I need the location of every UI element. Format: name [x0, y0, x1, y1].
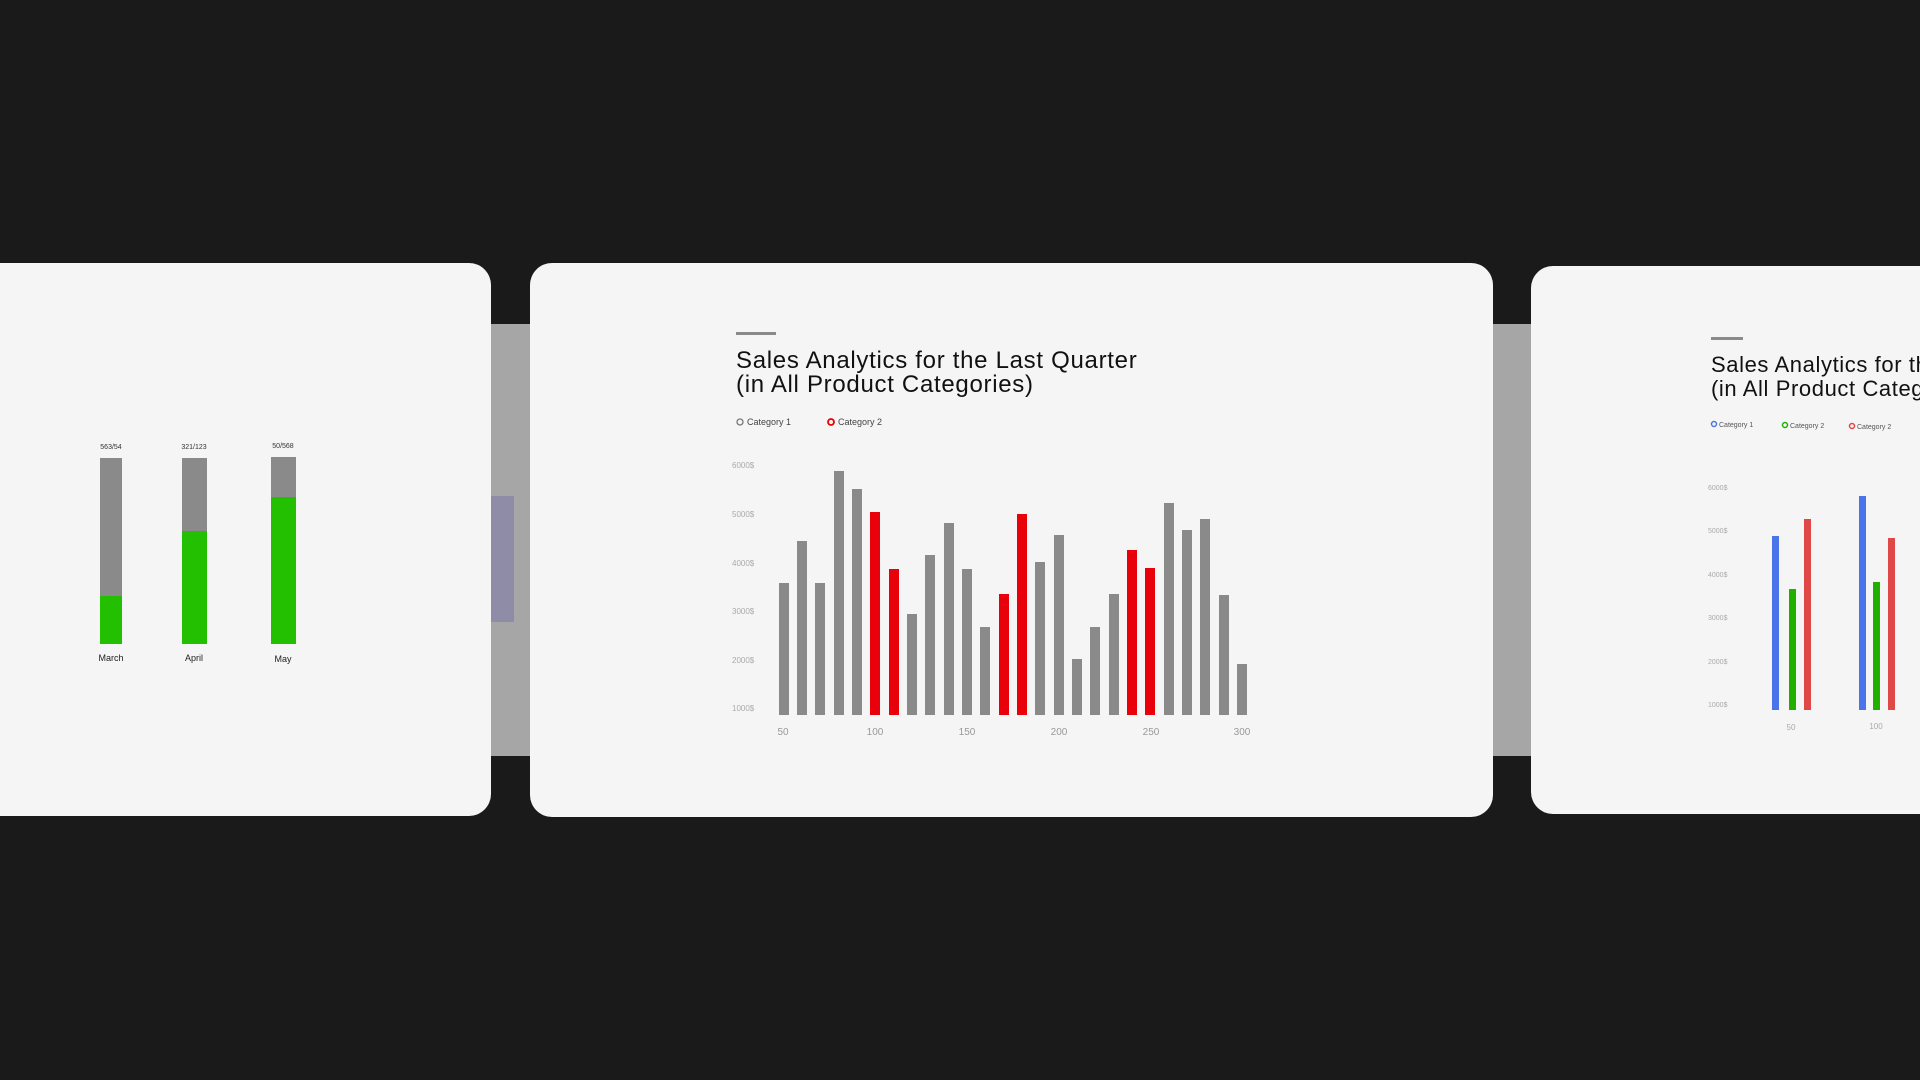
x axis labels: 100	[867, 727, 884, 738]
bar: March: 563/54	[100, 444, 122, 451]
y axis right: 2000$	[1708, 659, 1728, 666]
bar: May: 50/568	[272, 443, 294, 450]
legend: Category 2	[838, 417, 882, 427]
bar: May: May	[274, 654, 292, 664]
x axis right: 50	[1787, 723, 1796, 732]
bar: March: March	[98, 653, 124, 663]
title right	[1711, 352, 1920, 401]
panel: left card	[0, 263, 491, 816]
title: (in All Product Categories)	[736, 371, 1034, 398]
y axis right: 3000$	[1708, 615, 1728, 622]
panel: center card	[530, 263, 1493, 817]
x axis labels: 200	[1051, 727, 1068, 738]
y axis labels: 2000$	[732, 656, 755, 665]
panel: right card	[1531, 266, 1920, 814]
bar: April: 321/123	[181, 444, 207, 451]
y axis labels: 3000$	[732, 607, 755, 616]
x axis right: 100	[1869, 722, 1883, 731]
y axis labels: 5000$	[732, 510, 755, 519]
legend right: Category 2	[1790, 423, 1824, 430]
y axis labels	[732, 461, 755, 713]
title	[736, 347, 1137, 398]
legend right: Category 2	[1857, 424, 1891, 431]
x axis labels: 50	[777, 727, 789, 738]
bar: March	[98, 444, 124, 663]
bar: April	[181, 444, 207, 663]
background strip left	[480, 324, 540, 756]
grouped bar chart	[1772, 496, 1895, 710]
x axis labels: 300	[1234, 727, 1251, 738]
y axis right: 6000$	[1708, 485, 1728, 492]
bar: May	[271, 443, 296, 664]
legend	[737, 417, 882, 427]
legend right: Category 1	[1719, 422, 1753, 429]
bar chart	[779, 471, 1247, 715]
y axis labels: 4000$	[732, 559, 755, 568]
x axis right	[1787, 722, 1883, 732]
legend right	[1712, 422, 1891, 431]
x axis labels: 250	[1143, 727, 1160, 738]
y axis right: 5000$	[1708, 528, 1728, 535]
x axis labels: 150	[959, 727, 976, 738]
bar: April: April	[185, 653, 203, 663]
title: Sales Analytics for the Last Quarter	[736, 347, 1137, 374]
y axis labels: 1000$	[732, 704, 755, 713]
y axis right: 4000$	[1708, 572, 1728, 579]
y axis labels: 6000$	[732, 461, 755, 470]
y axis right: 1000$	[1708, 702, 1728, 709]
y axis right	[1708, 485, 1728, 709]
x axis labels	[777, 727, 1251, 738]
background strip right	[1483, 324, 1543, 756]
legend: Category 1	[747, 417, 791, 427]
